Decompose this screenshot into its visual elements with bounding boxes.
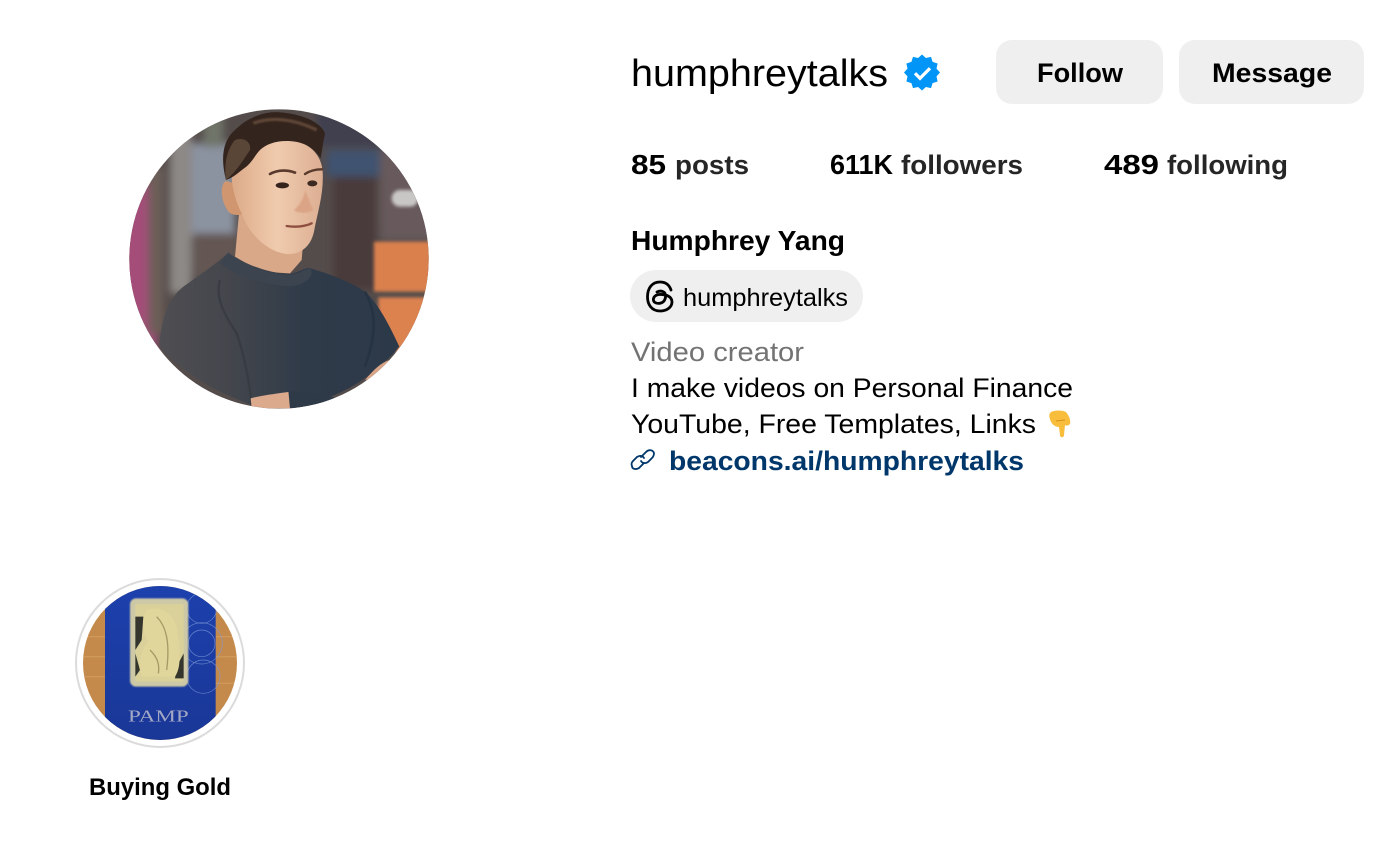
face — [232, 139, 323, 254]
button: Follow: Follow — [1037, 58, 1124, 88]
highlight label: Buying Gold — [89, 774, 231, 801]
stat: followers: 611K — [830, 149, 893, 180]
neck — [235, 210, 303, 273]
stat: posts — [631, 149, 749, 180]
icon: verified badge — [904, 54, 940, 90]
bio line 1: I make videos on Personal Finance — [631, 373, 1073, 403]
icon: pointing down hand — [1049, 410, 1070, 437]
PAMP wordmark: PAMP — [128, 707, 189, 726]
icon: threads logo — [648, 282, 672, 311]
category: video creator: Video creator — [631, 337, 804, 367]
threads pill — [630, 270, 863, 322]
gold bar — [130, 598, 188, 687]
profile photo — [129, 109, 429, 409]
stat: following: following — [1167, 150, 1288, 180]
stat: posts: 85 — [631, 149, 666, 180]
ear — [222, 181, 243, 215]
icon: link — [632, 450, 654, 469]
stat: followers: followers — [901, 150, 1023, 180]
crossed arms — [251, 392, 292, 408]
stat: posts: posts — [675, 150, 749, 180]
button: Message: Message — [1212, 58, 1332, 88]
stat: following: 489 — [1104, 149, 1159, 180]
display name: Humphrey Yang — [631, 225, 845, 256]
highlight image — [80, 583, 240, 743]
sweater — [159, 253, 399, 408]
stat: followers — [830, 149, 1023, 180]
facial features — [270, 171, 295, 174]
story highlight: buying gold — [76, 579, 244, 801]
button: Message — [1179, 40, 1364, 104]
threads pill: humphreytalks — [683, 284, 848, 312]
highlight ring — [76, 579, 244, 747]
bio line 2: YouTube, Free Templates, Links — [631, 409, 1036, 439]
website link: beacons.ai/humphreytalks — [669, 446, 1024, 476]
stat: following — [1104, 149, 1288, 180]
button: Follow — [996, 40, 1163, 104]
hair — [223, 112, 325, 180]
username: humphreytalks — [631, 53, 888, 95]
